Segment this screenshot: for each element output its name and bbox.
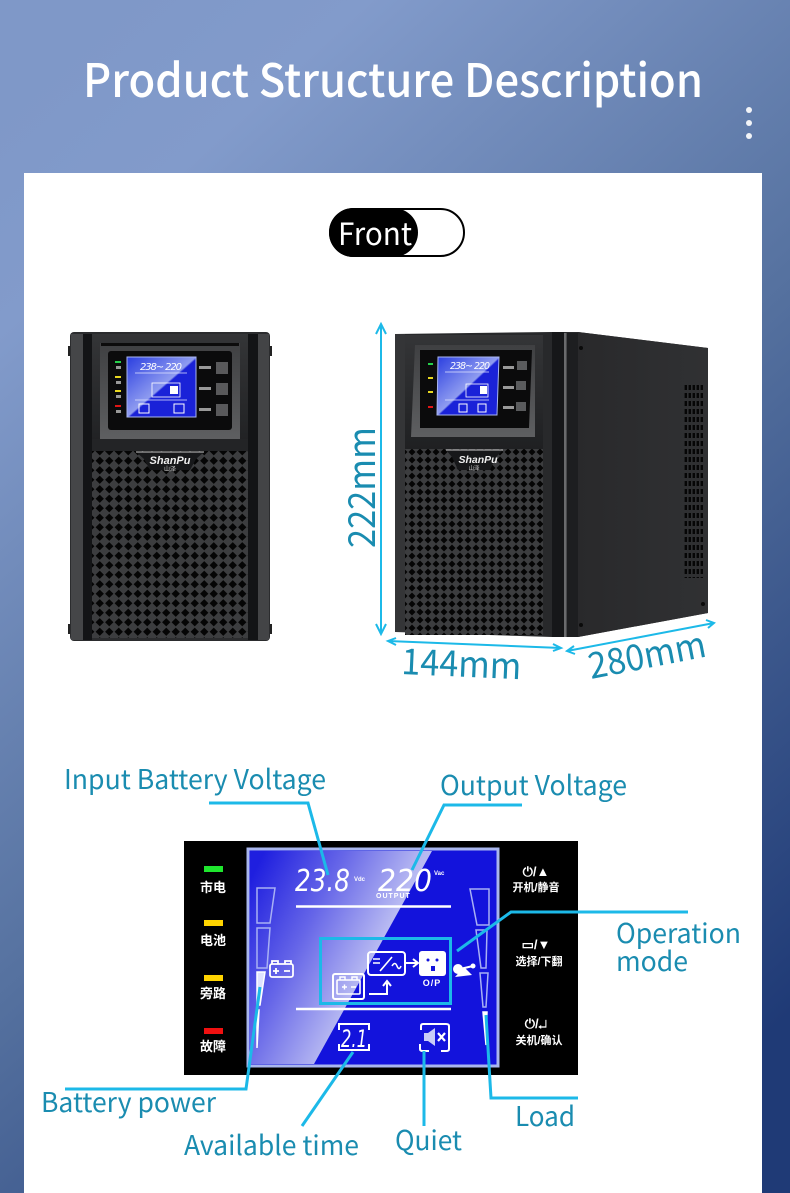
dimension label: 222mm: 222mm (332, 427, 386, 548)
operation mode box (320, 938, 450, 1004)
white panel (24, 173, 762, 1193)
right button labels (512, 864, 563, 1047)
label: operation mode: mode (616, 940, 688, 979)
angled view UPS: ShanPu (458, 454, 498, 466)
status lights: 旁路 (200, 986, 226, 1001)
label: O/P: O/P (423, 978, 441, 988)
angled view UPS: 山泽 (468, 464, 480, 472)
time reading (339, 1024, 369, 1053)
label: quiet: Quiet (395, 1119, 462, 1158)
LCD screen (248, 849, 498, 1066)
right button labels: ⏻/▲ (523, 864, 549, 879)
title: Product Structure Description (83, 45, 703, 111)
dimension label: 280mm: 280mm (583, 616, 710, 690)
status lights: 故障 (200, 1039, 226, 1054)
right button labels: ▭/▼ (522, 937, 550, 952)
leader: output voltage (412, 805, 522, 870)
status lights (200, 866, 226, 1054)
leader: battery power (65, 987, 260, 1089)
label: load: Load (515, 1095, 575, 1134)
icon: mute (420, 1024, 449, 1051)
icon: battery small (270, 961, 293, 977)
battery level bars (257, 888, 275, 1048)
dimension arrow: depth (567, 620, 714, 654)
LCD readings: 220 (378, 864, 432, 899)
status lights: 电池 (200, 933, 226, 948)
right button labels: 选择/下翻 (515, 954, 563, 968)
front view UPS (68, 332, 272, 641)
mini LCD (127, 357, 196, 417)
front view UPS: 山泽 (164, 465, 176, 473)
LCD readings: Vdc (354, 877, 366, 883)
label: input battery voltage: Input Battery Voltage (64, 758, 326, 797)
dimension arrow: height (376, 324, 386, 634)
mini LCD angled: 238~ 220 (450, 361, 490, 372)
front view UPS: ShanPu (150, 455, 191, 467)
right button labels: ⏻/↵ (525, 1016, 548, 1031)
mini LCD: 238~ 220 (140, 362, 182, 373)
right button labels: 开机/静音 (512, 880, 560, 894)
status lights: 市电 (200, 880, 226, 895)
load level bars (470, 889, 489, 1045)
dimension arrow: width (388, 638, 561, 651)
dimension label: 144mm: 144mm (401, 633, 523, 690)
operation icons (333, 951, 446, 999)
label: output voltage: Output Voltage (440, 764, 627, 803)
label: operation mode (616, 912, 741, 979)
leader: input battery voltage (209, 803, 328, 875)
LCD readings: OUTPUT (376, 893, 411, 900)
toggle: Front: Front (338, 209, 412, 254)
leader: load (486, 1015, 578, 1098)
label: operation mode: Operation (616, 912, 741, 951)
leader: available time (302, 1052, 353, 1126)
icon: fan load (453, 964, 476, 977)
icon: three dots (746, 107, 752, 139)
angled view UPS (395, 332, 708, 637)
leader: operation mode (457, 912, 688, 951)
label: battery power: Battery power (41, 1081, 217, 1120)
label: available time: Available time (184, 1124, 359, 1163)
LCD readings: 23.8 (295, 864, 350, 899)
control panel close-up (184, 841, 578, 1075)
right button labels: 关机/确认 (515, 1033, 563, 1047)
LCD readings (295, 864, 451, 1009)
time reading: 2.1 (341, 1025, 367, 1053)
LCD readings: Vac (434, 871, 445, 877)
toggle: Front (329, 208, 464, 257)
leader: quiet (422, 1051, 426, 1126)
mini LCD angled (437, 357, 499, 415)
